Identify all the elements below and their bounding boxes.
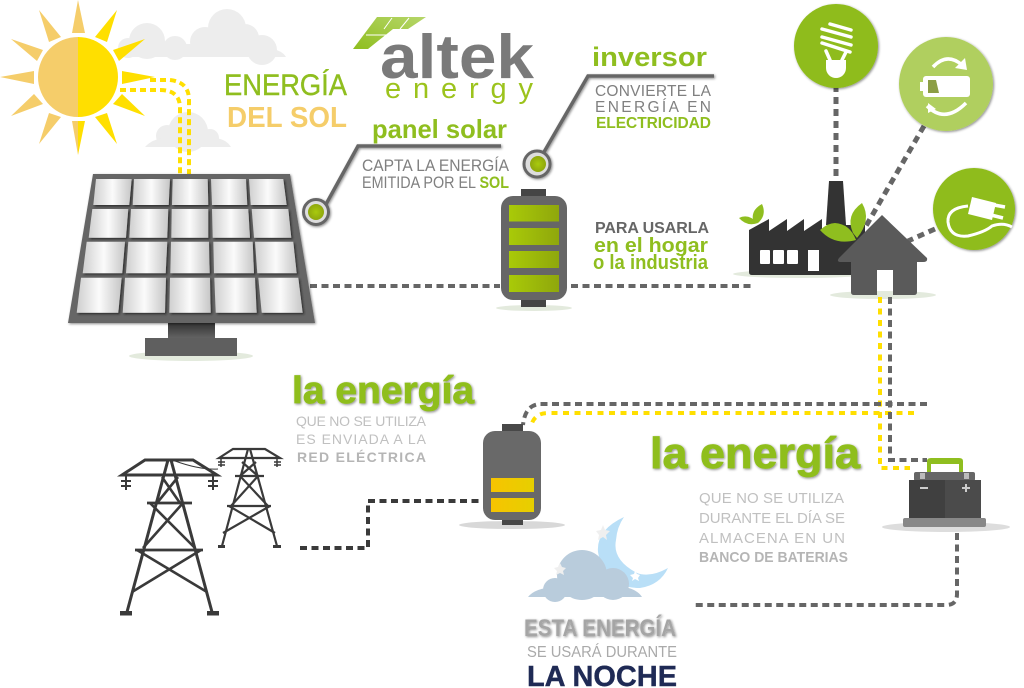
text: convierte la energia: ELECTRICIDAD	[596, 115, 711, 132]
text: convierte la energia	[595, 83, 712, 132]
logo: altek energy: energy	[385, 73, 534, 105]
heading: energia del sol: DEL SOL	[227, 102, 347, 134]
text: banco de baterias	[699, 490, 848, 566]
arrow: sun to panel	[120, 80, 189, 174]
arrow: grid to battery	[300, 501, 481, 548]
heading: panel solar: panel solar	[372, 114, 507, 144]
arrow: house to car battery, yellow	[532, 297, 914, 468]
text: capta la energia: EMITIDA POR EL SOL	[362, 174, 509, 192]
text: capta la energia: CAPTA LA ENERGÍA	[362, 156, 509, 175]
text: para usarla: en el hogar	[594, 235, 708, 257]
logo: altek energy	[353, 17, 535, 105]
text: banco de baterias: ALMACENA EN UN	[699, 530, 845, 547]
text: enviada a la red: RED ELÉCTRICA	[297, 449, 426, 465]
icon: sun	[0, 0, 155, 155]
arrow: panel to house	[310, 284, 753, 288]
heading: esta energia: ESTA ENERGÍA	[524, 614, 676, 642]
cloud: lower	[145, 112, 231, 152]
icon: light bulb	[794, 4, 878, 88]
text: convierte la energia: CONVIERTE LA	[595, 83, 712, 100]
icon: yellow battery	[459, 424, 565, 529]
text: para usarla	[593, 220, 709, 274]
heading: la energia, storage: la energía	[650, 429, 861, 478]
callout line: inversor	[524, 76, 714, 177]
text: banco de baterias: BANCO DE BATERIAS	[699, 549, 848, 566]
icon: green battery	[496, 189, 572, 311]
icon: small transmission tower	[218, 449, 281, 548]
heading: energia del sol	[224, 69, 347, 134]
text: enviada a la red	[296, 413, 427, 465]
icon: house	[830, 215, 936, 299]
arrow: car battery to night	[692, 533, 957, 605]
icon: large transmission tower	[120, 460, 219, 616]
icon: plug	[933, 168, 1015, 250]
text: enviada a la red: QUE NO SE UTILIZA	[296, 413, 427, 429]
cloud: upper	[107, 9, 286, 65]
text: banco de baterias: QUE NO SE UTILIZA	[699, 490, 844, 507]
text: se usara durante: SE USARÁ DURANTE	[527, 642, 677, 661]
heading: la energia, grid: la energía	[292, 370, 475, 412]
text: enviada a la red: ES ENVIADA A LA	[296, 431, 427, 447]
arrow: house to car battery, grey	[523, 297, 927, 460]
text: banco de baterias: DURANTE EL DÍA SE	[699, 510, 845, 527]
text: para usarla: PARA USARLA	[595, 220, 709, 237]
callout line: panel solar	[304, 146, 501, 224]
text: capta la energia	[362, 156, 509, 192]
heading: energia del sol: ENERGÍA	[224, 69, 347, 102]
icon: factory	[733, 181, 867, 278]
text: para usarla: o la industria	[593, 252, 709, 274]
heading: inversor: inversor	[592, 42, 708, 72]
icon: solar panel	[68, 174, 315, 361]
logo: altek energy: altek	[380, 23, 535, 92]
icon: car battery	[882, 458, 1010, 532]
icon: battery recharge	[899, 37, 993, 131]
icon: moon and cloud	[528, 517, 668, 602]
arrows: icons to buildings	[836, 85, 935, 241]
text: convierte la energia: ENERGÍA EN	[595, 99, 711, 116]
